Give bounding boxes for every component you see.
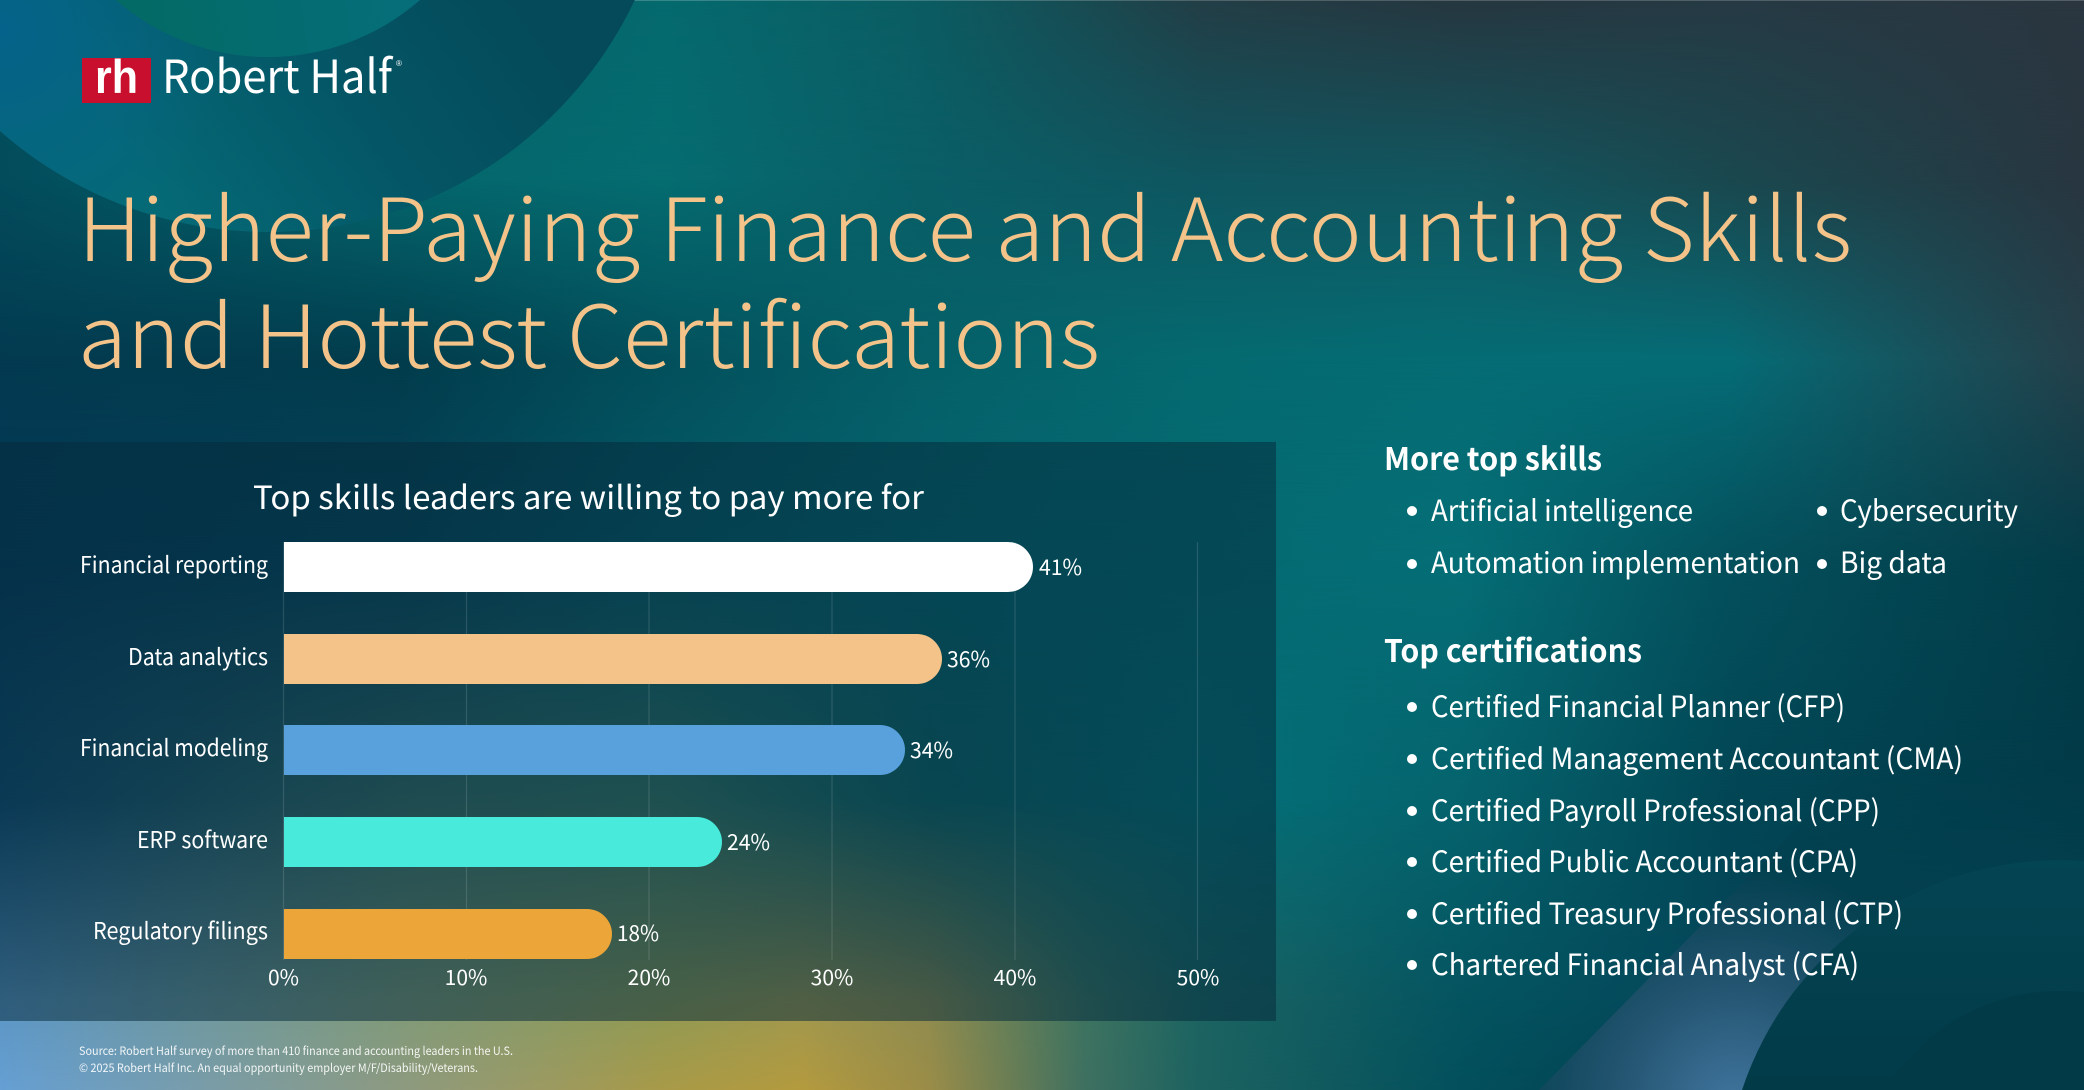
chart heading: Top skills leaders are willing to pay more for: [253, 473, 925, 519]
certifications list: Certified Treasury Professional (CTP): [1431, 891, 1903, 933]
skills list: Artificial intelligence: [1431, 488, 1693, 530]
logo mark: [82, 58, 151, 103]
logo: [82, 41, 402, 107]
bar: Data analytics: Data analytics: [128, 638, 268, 672]
bar: Financial reporting: 41%: [1039, 550, 1082, 582]
bar: Financial modeling: 34%: [910, 733, 953, 765]
skills list: Big data: [1840, 540, 1947, 582]
title: Higher-Paying Finance and Accounting Skills: [78, 161, 1852, 287]
x axis labels: 40%: [994, 962, 1036, 992]
certifications list: Certified Management Accountant (CMA): [1431, 736, 1963, 778]
x axis labels: 20%: [628, 962, 670, 992]
grid lines: [284, 542, 1198, 960]
x axis labels: 0%: [268, 962, 299, 992]
bar: Financial reporting: [80, 542, 1082, 592]
bar: Regulatory filings: 18%: [617, 916, 659, 948]
bar: Data analytics: [128, 634, 990, 684]
registered mark: ®: [396, 59, 402, 68]
x axis labels: 30%: [811, 962, 853, 992]
bar: ERP software: 24%: [727, 825, 770, 857]
more top skills: [1384, 434, 2018, 582]
decorative circles top left: [0, 0, 635, 232]
bar: Regulatory filings: [93, 909, 659, 959]
decorative circles bottom right: [1742, 860, 2084, 1090]
certifications list: Certified Payroll Professional (CPP): [1431, 788, 1880, 830]
certifications list: [1407, 684, 1963, 984]
bar: Financial modeling: [80, 725, 953, 775]
bar: Data analytics: 36%: [947, 642, 990, 674]
certifications list: Certified Public Accountant (CPA): [1431, 839, 1858, 881]
footer source note: © 2025 Robert Half Inc. An equal opportunity employer M/F/Disability/Veterans.: [79, 1060, 478, 1076]
title: [78, 161, 1852, 394]
footer source note: [79, 1043, 513, 1076]
title: and Hottest Certifications: [78, 268, 1100, 394]
bar: Financial modeling: Financial modeling: [80, 729, 268, 763]
x axis labels: 50%: [1177, 962, 1219, 992]
bar: Regulatory filings: Regulatory filings: [93, 912, 268, 946]
x axis labels: 10%: [445, 962, 487, 992]
footer source note: Source: Robert Half survey of more than 410 finance and accounting leaders in the U.S.: [79, 1043, 513, 1059]
heading: Top certifications: [1384, 626, 1642, 671]
skills list: Automation implementation: [1431, 540, 1800, 582]
panel: bar chart background: [0, 442, 1276, 1021]
bar: ERP software: [137, 817, 770, 867]
bar: ERP software: ERP software: [137, 821, 268, 855]
skills list: [1407, 488, 2018, 582]
top certifications: [1384, 626, 1963, 984]
heading: More top skills: [1384, 434, 1602, 479]
certifications list: Certified Financial Planner (CFP): [1431, 684, 1845, 726]
x axis labels: [268, 962, 1219, 992]
bar: Financial reporting: Financial reporting: [80, 546, 268, 580]
logo wordmark: Robert Half: [162, 41, 394, 107]
logo letters rh: rh: [95, 50, 138, 103]
skills list: Cybersecurity: [1840, 488, 2018, 530]
certifications list: Chartered Financial Analyst (CFA): [1431, 942, 1859, 984]
bar chart: [80, 542, 1219, 992]
